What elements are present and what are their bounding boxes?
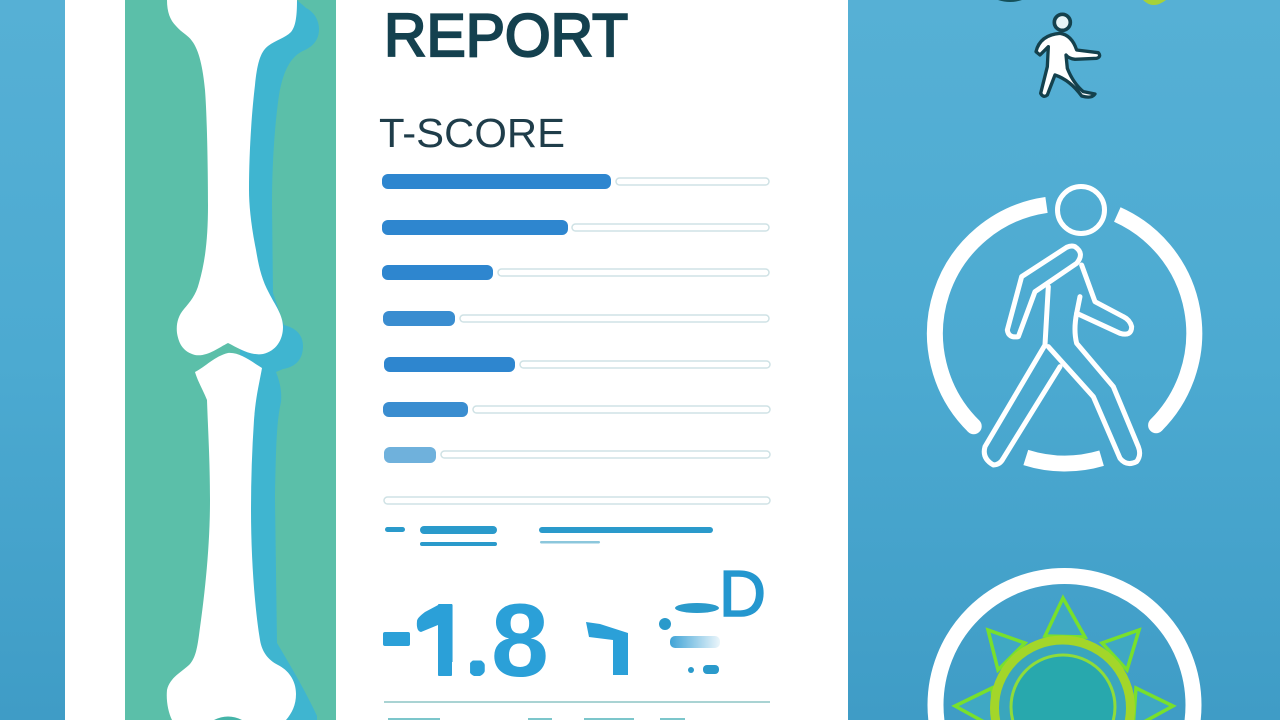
big value: -1.8 score: . — [463, 583, 492, 699]
heading: REPORT: REPORT — [384, 2, 628, 69]
panel: white report card — [336, 0, 848, 720]
bone: femur — [167, 0, 297, 355]
big value: -1.8 score: 8 — [491, 583, 549, 699]
sun disc — [994, 640, 1130, 720]
sun rays — [955, 598, 1173, 720]
unit glyph fragments — [586, 603, 720, 675]
unit letter D: D — [719, 557, 766, 630]
bone shadow: blue offset — [240, 0, 319, 720]
bar row 2 — [382, 220, 769, 235]
icon: top cut-off badges — [998, 0, 1166, 5]
big value: -1.8 score — [383, 604, 546, 677]
bar row 4 — [383, 311, 769, 326]
figure: body outline — [984, 246, 1140, 465]
sun inner ring — [1011, 655, 1115, 720]
bone: tibia — [167, 353, 296, 720]
ring: broken circle arcs — [935, 205, 1194, 464]
bar row 7 — [384, 447, 770, 463]
bar row 6 — [383, 402, 770, 417]
figure: head — [1058, 186, 1104, 234]
icon: small walking figure — [1036, 14, 1100, 97]
heading: T-SCORE: T-SCORE — [379, 110, 565, 156]
bar row 5 — [384, 357, 770, 372]
icon: large walking figure in ring — [935, 186, 1194, 465]
caption: blurred text lines — [385, 526, 713, 546]
divider and cut-off row — [384, 701, 770, 720]
bone notch — [214, 716, 242, 720]
ring: sun badge — [936, 576, 1194, 720]
bar row 1 — [382, 174, 769, 189]
panel: white left strip — [65, 0, 125, 720]
panel: green bone panel — [125, 0, 336, 720]
bar row 3 — [382, 265, 769, 280]
big value: -1.8 score: 1 — [414, 583, 472, 699]
icon: sun in ring — [936, 576, 1194, 720]
bar chart: T-score bars — [382, 174, 770, 504]
bar row 8: empty track — [384, 497, 770, 504]
